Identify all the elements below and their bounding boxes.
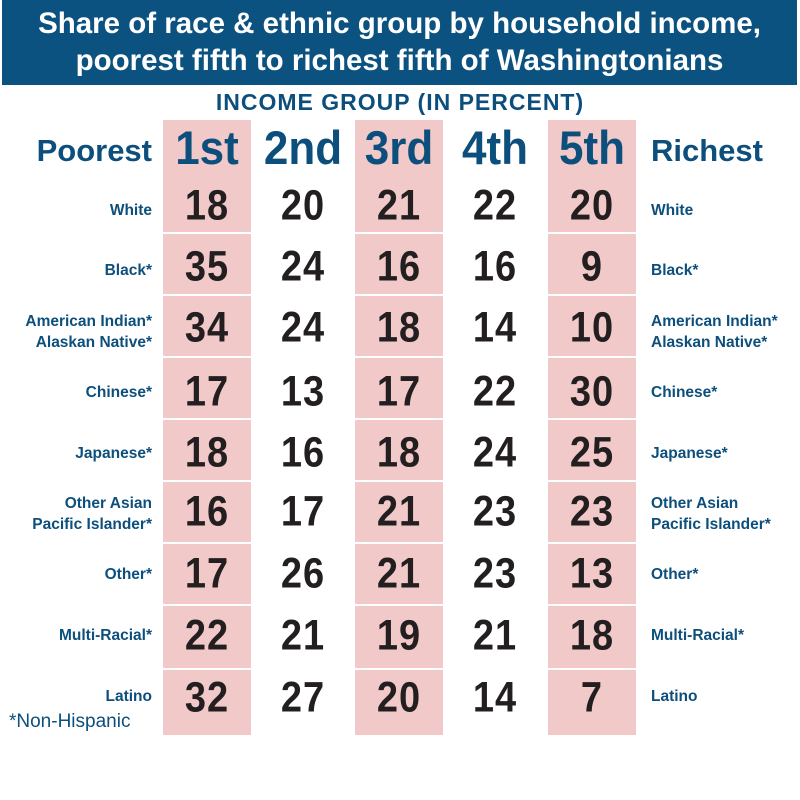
header row: 4th — [462, 122, 528, 175]
pink column 3 — [355, 120, 443, 735]
data table: 23 — [570, 488, 614, 535]
data table: 18 — [377, 429, 421, 476]
data table: 24 — [281, 304, 325, 351]
data table: 20 — [570, 182, 614, 229]
data table: White — [110, 202, 152, 219]
data table: 17 — [185, 368, 229, 415]
data table: 32 — [185, 674, 229, 721]
data table: Other Asian — [65, 495, 152, 512]
data table: 25 — [570, 429, 614, 476]
data table: Other* — [105, 566, 152, 583]
data table: 17 — [377, 368, 421, 415]
data table: 30 — [570, 368, 614, 415]
data table: 21 — [377, 488, 421, 535]
data table: 10 — [570, 304, 614, 351]
data table: 18 — [185, 429, 229, 476]
data table: 21 — [281, 612, 325, 659]
data table: Multi-Racial* — [59, 627, 152, 644]
data table: 27 — [281, 674, 325, 721]
data table: 9 — [581, 243, 603, 290]
header row: 2nd — [264, 122, 342, 175]
data table: Japanese* — [75, 445, 152, 462]
data table: Black* — [651, 262, 698, 279]
data table: Pacific Islander* — [32, 516, 152, 533]
data table: 16 — [185, 488, 229, 535]
data table: 34 — [185, 304, 229, 351]
data table: 21 — [473, 612, 517, 659]
title bar: poorest fifth to richest fifth of Washingtonians — [76, 44, 723, 77]
data table: 18 — [185, 182, 229, 229]
data table: 17 — [185, 550, 229, 597]
data table: 21 — [377, 550, 421, 597]
data table: 19 — [377, 612, 421, 659]
header row: 1st — [175, 122, 239, 175]
data table: Chinese* — [651, 384, 717, 401]
subtitle: INCOME GROUP (IN PERCENT) — [216, 89, 584, 115]
data table: 22 — [473, 182, 517, 229]
data table: Latino — [106, 688, 152, 705]
data table: Black* — [105, 262, 152, 279]
data table: 17 — [281, 488, 325, 535]
data table: Pacific Islander* — [651, 516, 771, 533]
header row: Richest — [651, 133, 763, 168]
title bar: Share of race & ethnic group by household income, — [38, 7, 761, 40]
pink column 1 — [163, 120, 251, 735]
footnote: *Non-Hispanic — [9, 711, 130, 732]
data table: White — [651, 202, 693, 219]
data table: Alaskan Native* — [651, 334, 767, 351]
data table: 26 — [281, 550, 325, 597]
data table: 16 — [377, 243, 421, 290]
data table: American Indian* — [25, 313, 152, 330]
data table: 14 — [473, 674, 517, 721]
data table: 7 — [581, 674, 603, 721]
data table: 13 — [281, 368, 325, 415]
data table: Alaskan Native* — [36, 334, 152, 351]
data table: 20 — [281, 182, 325, 229]
data table: 14 — [473, 304, 517, 351]
data table: 20 — [377, 674, 421, 721]
data table: Other Asian — [651, 495, 738, 512]
data table: 23 — [473, 550, 517, 597]
data table: 18 — [570, 612, 614, 659]
data table: Latino — [651, 688, 698, 705]
header row — [37, 122, 763, 175]
data table: 18 — [377, 304, 421, 351]
data table: 24 — [473, 429, 517, 476]
header row: 3rd — [365, 122, 433, 175]
data table: 23 — [473, 488, 517, 535]
title bar — [2, 0, 797, 85]
data table: Other* — [651, 566, 698, 583]
data table: 35 — [185, 243, 229, 290]
data table: 16 — [281, 429, 325, 476]
pink column 5 — [548, 120, 636, 735]
data table: 16 — [473, 243, 517, 290]
data table: 13 — [570, 550, 614, 597]
data table: 22 — [473, 368, 517, 415]
data table — [25, 182, 778, 721]
data table: 24 — [281, 243, 325, 290]
data table: 22 — [185, 612, 229, 659]
data table: Japanese* — [651, 445, 728, 462]
data table: American Indian* — [651, 313, 778, 330]
data table: 21 — [377, 182, 421, 229]
data table: Multi-Racial* — [651, 627, 744, 644]
header row: Poorest — [37, 133, 152, 168]
data table: Chinese* — [86, 384, 152, 401]
header row: 5th — [559, 122, 625, 175]
